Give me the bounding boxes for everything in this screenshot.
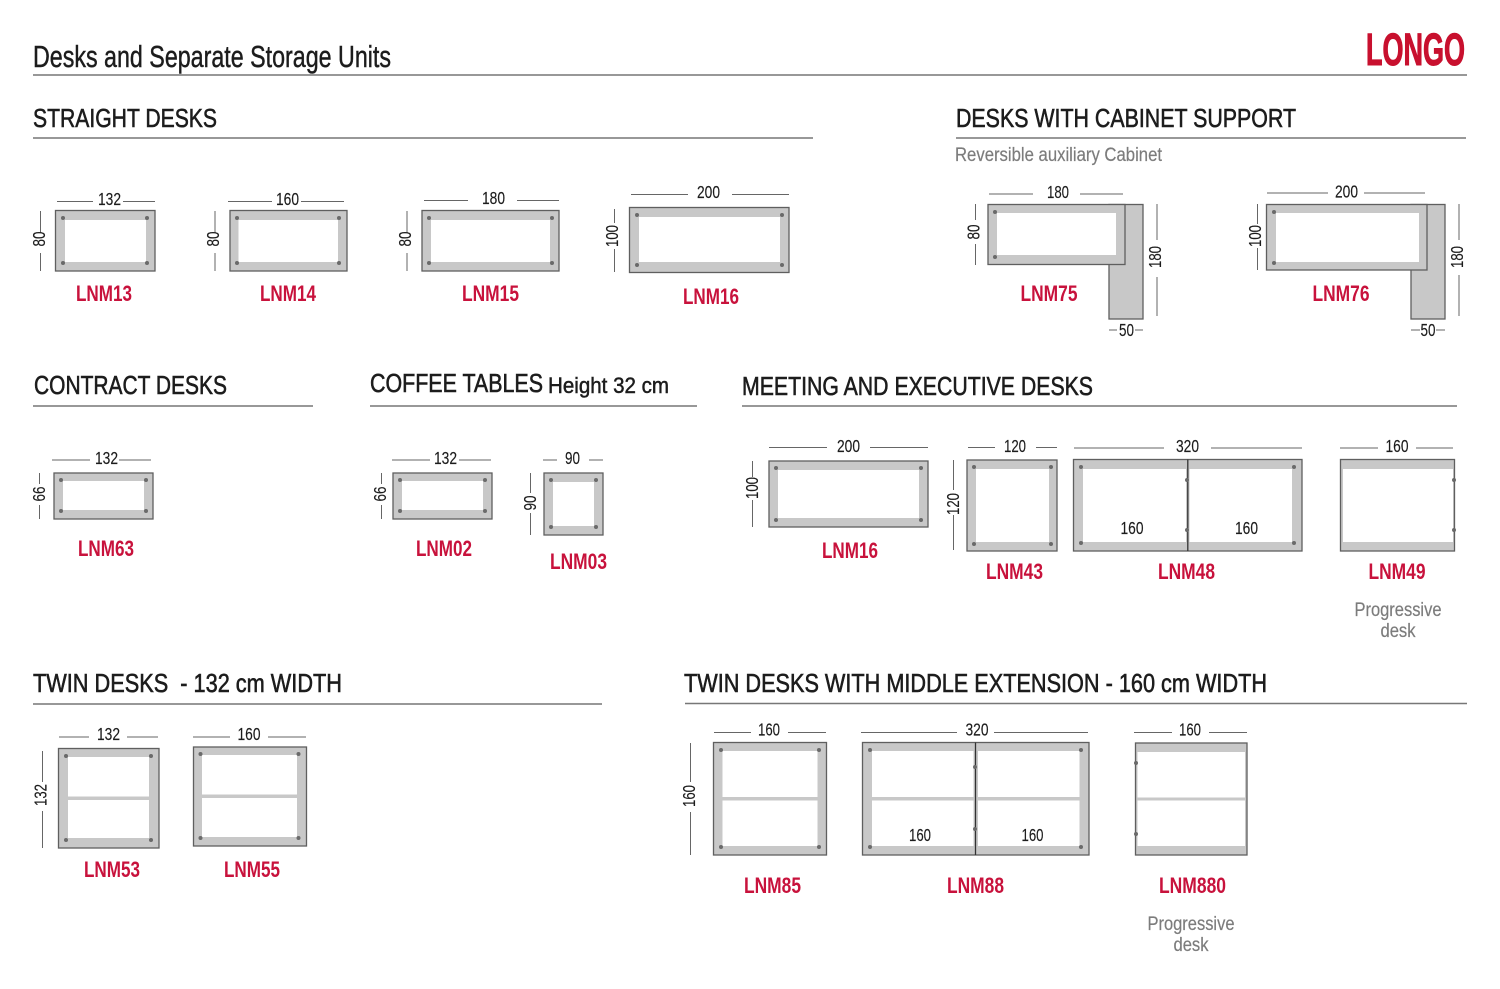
desk LNM880: LNM880 [1159, 873, 1226, 898]
note: reversible auxiliary cabinet: Reversible auxiliary Cabinet [955, 145, 1163, 166]
desk LNM76: 50 [1420, 320, 1436, 340]
desk LNM76: 180 [1447, 246, 1467, 268]
desk LNM16: 200 [697, 182, 720, 202]
desk LNM76 [1245, 182, 1467, 340]
desk LNM13: LNM13 [76, 281, 132, 306]
desk LNM02 [370, 448, 492, 561]
heading: meeting and executive desks: MEETING AND EXECUTIVE DESKS [742, 371, 1093, 401]
desk LNM53 [30, 724, 159, 882]
desk LNM14: LNM14 [260, 281, 317, 306]
heading: contract desks: CONTRACT DESKS [34, 370, 227, 400]
desk LNM48: 160 [1120, 518, 1144, 538]
desk LNM16 meeting: 200 [837, 436, 860, 456]
desk LNM16 [602, 182, 789, 309]
heading: twin desks 132: TWIN DESKS - 132 cm WIDTH [33, 668, 342, 698]
desk LNM63: 132 [95, 448, 118, 468]
desk LNM02: 66 [370, 486, 390, 502]
desk LNM88: 160 [1022, 825, 1044, 845]
desk LNM15: LNM15 [462, 281, 519, 306]
desk LNM14: 80 [203, 231, 223, 246]
desk LNM53: 132 [97, 724, 120, 744]
panel: twin desks 132 [30, 668, 602, 882]
desk LNM13 [29, 189, 155, 306]
desk LNM76: LNM76 [1312, 281, 1370, 306]
desk LNM15: 180 [482, 188, 505, 208]
desk LNM49: Progressive [1354, 600, 1442, 621]
desk LNM48 [1074, 436, 1302, 584]
desk LNM55: LNM55 [224, 857, 280, 882]
desk LNM75: 180 [1145, 246, 1165, 268]
desk LNM75 [964, 182, 1165, 340]
desk LNM49: desk [1380, 621, 1416, 642]
desk LNM14: 160 [276, 189, 299, 209]
desk LNM880: Progressive [1148, 914, 1234, 935]
heading: desks with cabinet support: DESKS WITH CABINET SUPPORT [956, 103, 1296, 133]
desk LNM43 [943, 436, 1057, 584]
panel: meeting and executive desks [742, 371, 1457, 642]
desk LNM48: 320 [1176, 436, 1199, 456]
desk LNM85 [679, 720, 826, 898]
desk LNM43: LNM43 [986, 559, 1043, 584]
desk LNM15: 80 [395, 231, 415, 246]
desk LNM75: 50 [1119, 320, 1134, 340]
desk LNM85: LNM85 [744, 873, 801, 898]
desk LNM55: 160 [238, 724, 261, 744]
panel: straight desks [29, 103, 813, 309]
desk LNM16: 100 [602, 225, 622, 247]
desk LNM55 [193, 724, 306, 882]
panel: contract desks [29, 370, 313, 561]
heading: coffee tables: COFFEE TABLES [370, 368, 543, 398]
desk LNM15 [395, 188, 559, 306]
desk LNM49: LNM49 [1368, 559, 1426, 584]
desk LNM43: 120 [1004, 436, 1026, 456]
desk LNM53: LNM53 [84, 857, 140, 882]
desk LNM88: 320 [966, 720, 989, 740]
desk LNM53: 132 [30, 784, 50, 806]
desk LNM75: 80 [964, 224, 984, 240]
heading: twin desks with middle extension: TWIN DESKS WITH MIDDLE EXTENSION - 160 cm WIDTH [684, 668, 1267, 698]
panel: twin desks with middle extension [679, 668, 1467, 956]
desk LNM76: 100 [1245, 225, 1265, 247]
desk LNM13: 80 [29, 231, 49, 246]
desk LNM03 [520, 448, 607, 574]
panel: desks with cabinet support [955, 103, 1467, 340]
heading: straight desks: STRAIGHT DESKS [33, 103, 217, 133]
desk LNM49: 160 [1386, 436, 1409, 456]
heading note: height 32 cm: Height 32 cm [548, 373, 669, 398]
desk LNM880 [1134, 720, 1247, 956]
desk LNM16 meeting: 100 [742, 477, 762, 499]
desk LNM88: LNM88 [947, 873, 1004, 898]
desk LNM16 meeting [742, 436, 928, 563]
desk LNM85: 160 [758, 720, 780, 740]
panel: coffee tables [370, 368, 697, 574]
desk LNM63: 66 [29, 486, 49, 502]
desk LNM43: 120 [943, 493, 963, 515]
desk LNM16 meeting: LNM16 [822, 538, 878, 563]
desk LNM02: 132 [434, 448, 457, 468]
desk LNM49 [1340, 436, 1456, 642]
desk LNM48: 160 [1235, 518, 1258, 538]
desk LNM03: 90 [520, 495, 540, 510]
title: Desks and Separate Storage Units [33, 39, 391, 74]
desk LNM63: LNM63 [78, 536, 134, 561]
desk LNM02: LNM02 [416, 536, 472, 561]
desk LNM85: 160 [679, 785, 699, 807]
desk LNM75: 180 [1047, 182, 1069, 202]
desk LNM76: 200 [1335, 182, 1358, 202]
desk LNM88: 160 [909, 825, 931, 845]
desk LNM88 [861, 720, 1089, 898]
desk LNM03: LNM03 [550, 549, 607, 574]
desk LNM63 [29, 448, 153, 561]
desk LNM03: 90 [565, 448, 580, 468]
desk LNM880: 160 [1179, 720, 1201, 740]
desk LNM16: LNM16 [683, 284, 739, 309]
desk LNM75: LNM75 [1020, 281, 1078, 306]
desk LNM13: 132 [98, 189, 121, 209]
desk LNM48: LNM48 [1158, 559, 1215, 584]
desk LNM14 [203, 189, 347, 306]
desk LNM880: desk [1174, 935, 1209, 956]
